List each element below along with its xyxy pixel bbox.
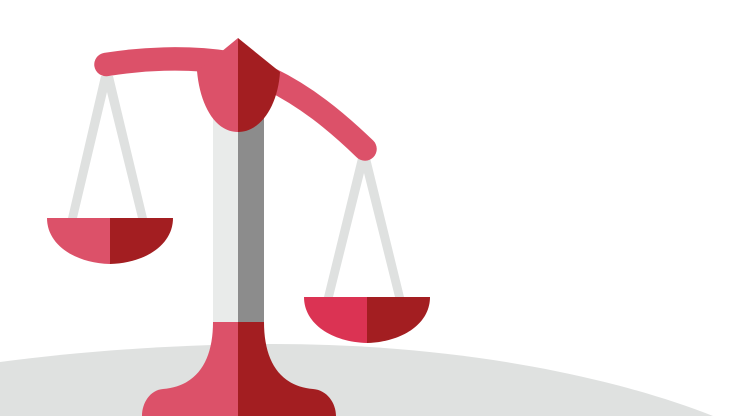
column [213, 115, 264, 322]
left pan strings [68, 76, 147, 218]
base [142, 322, 336, 416]
beam [106, 59, 365, 149]
left pan [47, 218, 173, 264]
ground ellipse [0, 344, 713, 416]
scale head [197, 38, 280, 132]
right pan [304, 297, 430, 343]
right pan strings [324, 158, 404, 297]
